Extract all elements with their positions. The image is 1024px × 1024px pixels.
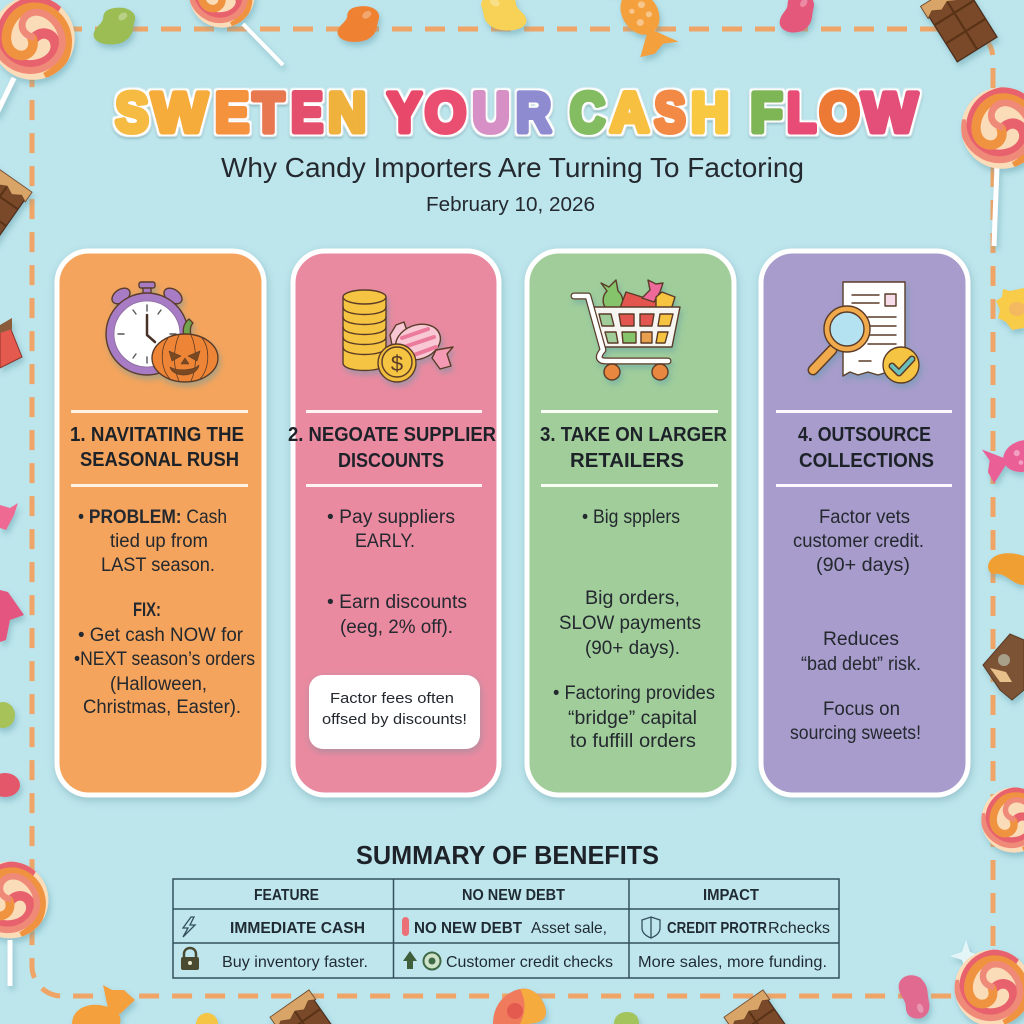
card 4 body text: Focus on [823, 699, 900, 720]
card 2 body text: • Pay suppliers [327, 507, 455, 528]
title: U [472, 80, 510, 144]
title: S [654, 80, 686, 144]
title: Y [388, 80, 422, 144]
title: W [152, 80, 207, 144]
card 4 body text: (90+ days) [816, 555, 910, 576]
card 1 heading [70, 424, 244, 471]
card 2 heading: DISCOUNTS [338, 450, 444, 472]
table row 1: CREDIT PROTR [667, 920, 767, 937]
icon: stopwatch and pumpkin [106, 282, 218, 382]
card 4 body text [790, 507, 924, 744]
card 4 heading: 4. OUTSOURCE [798, 424, 931, 446]
rule [541, 410, 718, 413]
callout: factor fees: offsed by discounts! [322, 711, 467, 728]
card 4 body text: Factor vets [819, 507, 910, 528]
title: O [820, 80, 860, 144]
table header row [254, 887, 759, 904]
title: E [291, 80, 323, 144]
card 4 body text: “bad debt” risk. [801, 654, 921, 675]
title: L [787, 80, 816, 144]
title: R [516, 80, 551, 144]
card 2 body text: (eeg, 2% off). [340, 617, 453, 638]
card 1 body text: LAST season. [101, 555, 215, 576]
card 4 heading: COLLECTIONS [799, 450, 934, 472]
card 1 heading: SEASONAL RUSH [80, 449, 239, 471]
panel: card 2 supplier discounts [288, 251, 499, 795]
callout: factor fees [309, 675, 480, 749]
table row 1: Asset sale, [531, 920, 607, 937]
title: H [691, 80, 729, 144]
rule [306, 410, 482, 413]
table: summary of benefits [173, 879, 839, 978]
icon: coins and candy [343, 290, 453, 382]
card 2 body text: • Earn discounts [327, 592, 467, 613]
table row 1: IMMEDIATE CASH [230, 920, 365, 937]
title [116, 80, 917, 144]
card 4 body text: sourcing sweets! [790, 723, 921, 744]
title: A [610, 80, 649, 144]
table row 2: Buy inventory faster. [222, 954, 368, 971]
card 3 body text: SLOW payments [559, 613, 701, 634]
table row 2: Customer credit checks [446, 954, 613, 971]
panel: card 1 seasonal rush [57, 251, 264, 795]
table row 1: NO NEW DEBT [414, 920, 522, 937]
card 3 body text: to fuffill orders [570, 731, 696, 752]
heading: summary of benefits: SUMMARY OF BENEFITS [356, 840, 659, 870]
callout: factor fees: Factor fees often [330, 690, 454, 707]
card 3 heading: 3. TAKE ON LARGER [540, 424, 728, 446]
card 2 body text: EARLY. [355, 531, 415, 552]
title: E [215, 80, 249, 144]
card 3 body text: Big orders, [585, 588, 680, 609]
card 3 heading [540, 424, 728, 472]
card 1 heading: 1. NAVITATING THE [70, 424, 244, 446]
table header row: IMPACT [703, 887, 759, 904]
card 2 heading: 2. NEGOATE SUPPLIER [288, 424, 497, 446]
title: F [750, 80, 782, 144]
title: W [862, 80, 917, 144]
subtitle: Why Candy Importers Are Turning To Factoring [221, 152, 804, 183]
panel: card 3 larger retailers [527, 251, 734, 795]
title: S [116, 80, 148, 144]
title: N [328, 80, 366, 144]
card 1 body text: • Get cash NOW for [78, 625, 244, 646]
card 3 body text: • Big spplers [582, 507, 680, 528]
title: O [425, 80, 466, 144]
table row 1: Rchecks [768, 920, 830, 937]
rule [776, 410, 952, 413]
card 2 body text [327, 507, 467, 638]
table row 1 [183, 917, 830, 938]
card 1 body text: •NEXT season’s orders [74, 649, 255, 670]
date: February 10, 2026 [426, 194, 595, 216]
card 4 body text: customer credit. [793, 531, 924, 552]
card 1 body text: (Halloween, [110, 674, 207, 695]
icon: receipt and magnifier [813, 282, 919, 383]
card 1 body text: Christmas, Easter). [83, 697, 241, 718]
rule [71, 410, 248, 413]
card 4 heading [798, 424, 934, 472]
card 3 body text: “bridge” capital [568, 708, 697, 729]
title: C [570, 80, 605, 144]
card 3 body text [553, 507, 715, 752]
card 3 heading: RETAILERS [570, 450, 684, 472]
panel: card 4 outsource collections [761, 251, 968, 795]
title: T [253, 80, 284, 144]
table row 2: More sales, more funding. [638, 954, 827, 971]
card 4 body text: Reduces [823, 629, 899, 650]
card 1 body text: tied up from [110, 531, 208, 552]
card 2 heading [288, 424, 497, 472]
card 3 body text: (90+ days). [585, 638, 680, 659]
table row 2 [181, 948, 827, 971]
table header row: NO NEW DEBT [462, 887, 565, 904]
card 1 body text: FIX: [133, 600, 161, 621]
card 1 body text [74, 507, 255, 718]
table header row: FEATURE [254, 887, 319, 904]
icon: shopping cart [574, 280, 680, 380]
card 1 body text: • PROBLEM: Cash [78, 507, 227, 528]
icon: coins and candy: $ [391, 351, 403, 376]
card 3 body text: • Factoring provides [553, 683, 715, 704]
